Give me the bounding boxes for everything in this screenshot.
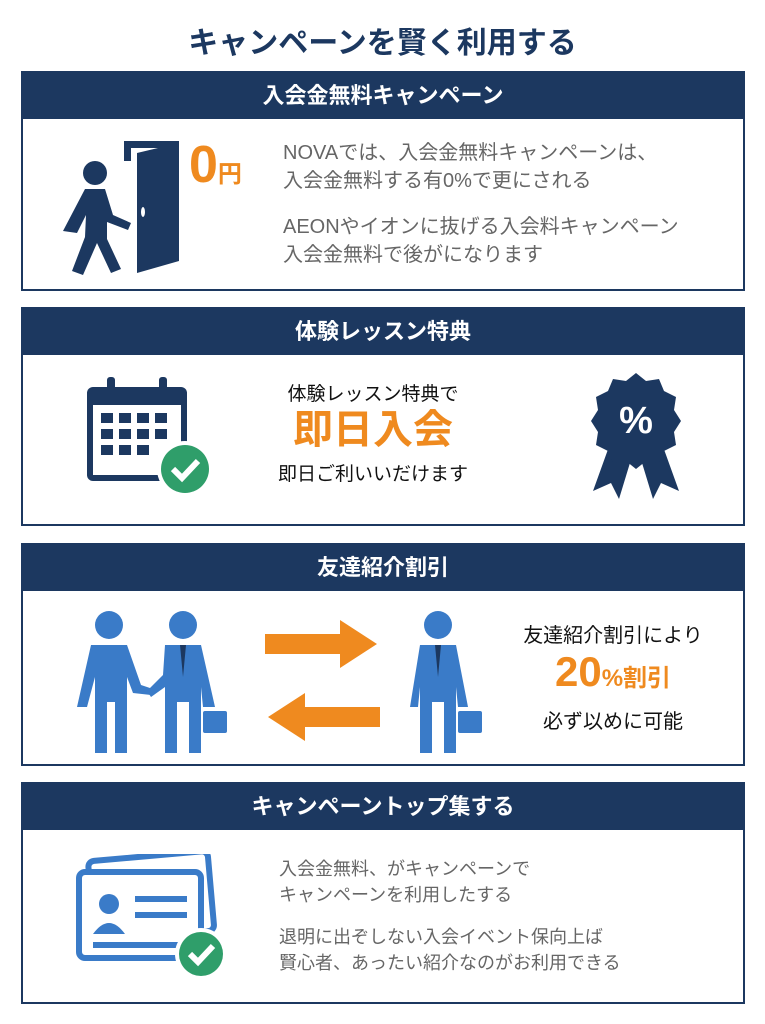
icon: percent badge [591, 373, 681, 499]
title: キャンペーンを賢く利用する [188, 27, 577, 60]
callout: 0円: 0円 [189, 136, 242, 194]
text block [283, 142, 657, 192]
text block: AEONやイオンに抜げる入会料キャンペーン [283, 216, 679, 238]
text block [283, 216, 679, 266]
heading [23, 309, 743, 355]
text block: 退明に出ぞしない入会イベント保向上ば [279, 927, 603, 947]
heading: 入会金無料キャンペーン [263, 83, 503, 108]
text block: NOVAでは、入会金無料キャンペーンは、 [283, 142, 657, 164]
icon: ID cards with check [76, 854, 223, 976]
text block: 賢心者、あったい紹介なのがお利用できる [279, 953, 621, 973]
arrow: right [265, 620, 377, 668]
icon: handshake people [77, 611, 227, 753]
heading [23, 784, 743, 830]
callout: 即日入会: 即日入会 [293, 408, 453, 452]
panel: キャンペーントップ集する [21, 782, 745, 1004]
heading: 友達紹介割引 [317, 555, 449, 580]
text block [279, 927, 621, 973]
callout: 20%割引: 20%割引 [555, 648, 671, 695]
heading [23, 73, 743, 119]
heading: キャンペーントップ集する [252, 794, 514, 819]
text block: 入会金無料で後がになります [283, 244, 543, 266]
text block: 友達紹介割引により [523, 625, 703, 647]
icon: calendar with check [87, 377, 209, 493]
icon: person entering door [63, 141, 179, 275]
text block: 入会金無料、がキャンペーンで [279, 859, 530, 879]
panel: 体験レッスン特典 [21, 307, 745, 526]
panel: 友達紹介割引 [21, 543, 745, 766]
text block: 入会金無料する有0%で更にされる [283, 170, 592, 192]
panel: 入会金無料キャンペーン [21, 71, 745, 291]
text block: 即日ご利いいだけます [278, 464, 468, 485]
text block: 体験レッスン特典で [287, 384, 458, 405]
text block [279, 859, 530, 905]
icon: percent badge: % [619, 400, 653, 442]
heading: 体験レッスン特典 [295, 319, 471, 344]
arrow: left [268, 693, 380, 741]
text block: 必ず以めに可能 [543, 711, 683, 733]
icon: businessman [410, 611, 482, 753]
heading [23, 545, 743, 591]
text block: キャンペーンを利用したする [279, 885, 512, 905]
